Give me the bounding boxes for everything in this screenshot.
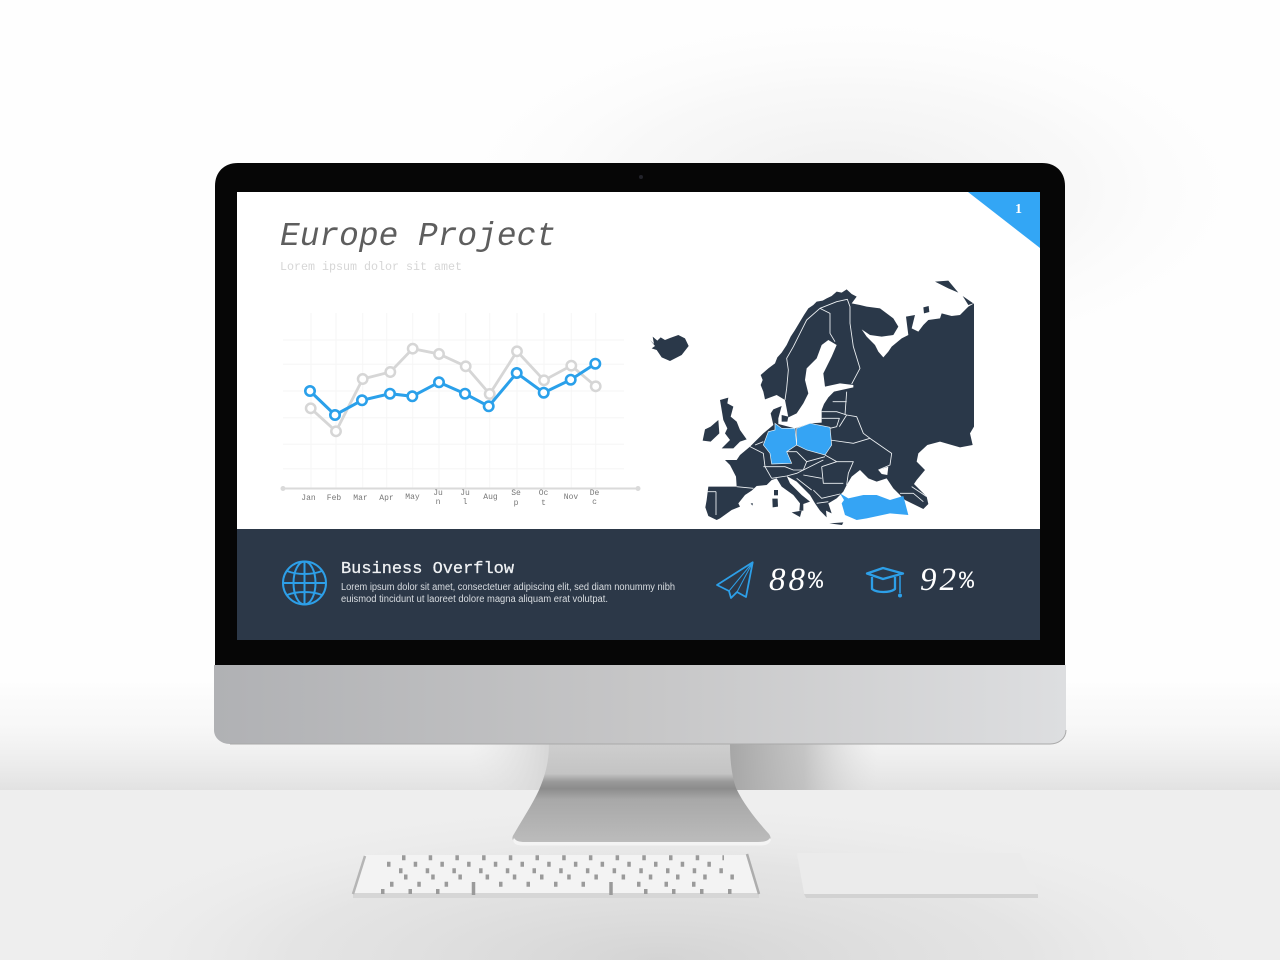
monitor chin <box>214 665 1066 744</box>
ireland <box>703 420 719 442</box>
month labels: n <box>436 498 441 507</box>
trackpad <box>797 853 1038 898</box>
title: Europe Project <box>280 218 556 255</box>
month labels: Se <box>511 489 521 498</box>
monitor <box>214 163 1066 846</box>
month labels: Aug <box>483 493 498 502</box>
blue data series <box>305 359 600 420</box>
month labels: Mar <box>353 494 368 503</box>
month labels: c <box>592 498 597 507</box>
stat: 88 percent: % <box>808 567 824 596</box>
mainland europe and russia <box>705 289 974 520</box>
month labels: Ju <box>433 489 443 498</box>
slide screen <box>237 192 1040 640</box>
monitor stand <box>512 744 771 846</box>
monitor bezel <box>215 163 1065 665</box>
country borders <box>707 299 927 515</box>
stat: 92 percent: 92 <box>920 562 959 598</box>
icon: globe <box>283 562 326 604</box>
month labels: Jan <box>301 494 316 503</box>
heading: business overflow: Business Overflow <box>341 560 515 579</box>
month labels: Ju <box>460 489 470 498</box>
keyboard <box>353 854 759 898</box>
line chart <box>280 313 640 508</box>
desk shading <box>40 795 1280 960</box>
islands <box>751 281 973 525</box>
month labels: Apr <box>379 494 394 503</box>
stat: 88 percent: 88 <box>769 562 808 598</box>
month labels: May <box>405 493 420 502</box>
body text: Lorem ipsum dolor sit amet, consectetuer adipiscing elit, sed diam nonummy nibh <box>341 582 675 593</box>
grey data series <box>306 344 600 436</box>
great britain <box>720 398 747 448</box>
iceland <box>650 335 689 361</box>
month labels: p <box>514 499 519 508</box>
footer band <box>237 529 1040 640</box>
icon: graduation cap <box>867 568 903 598</box>
page number corner: 1 <box>1015 202 1022 217</box>
highlighted germany <box>763 423 797 464</box>
month labels: t <box>541 499 546 508</box>
europe map <box>650 281 974 525</box>
chart axis <box>280 486 640 491</box>
month labels: Oc <box>539 489 548 498</box>
desk surface <box>0 790 1280 960</box>
highlighted turkey <box>840 493 908 520</box>
wall shadow left of stand <box>470 744 550 790</box>
highlighted poland <box>797 423 832 455</box>
icon: paper plane <box>717 562 753 598</box>
stat: 92 percent: % <box>959 567 975 596</box>
month labels: De <box>590 489 599 498</box>
wall shading above monitor <box>420 0 1280 380</box>
camera <box>639 175 643 179</box>
month labels: Feb <box>327 494 341 503</box>
body text: euismod tincidunt ut laoreet dolore magna aliquam erat volutpat. <box>341 594 608 605</box>
sea of azov <box>878 467 888 475</box>
month labels: Nov <box>564 493 578 502</box>
wall shading near desk <box>0 680 1280 790</box>
subtitle: Lorem ipsum dolor sit amet <box>280 260 462 274</box>
page number corner <box>968 192 1040 248</box>
body text <box>341 582 675 605</box>
month labels: l <box>463 498 468 507</box>
chin edge <box>230 730 1066 744</box>
wall shadow right of stand <box>729 744 879 790</box>
month labels <box>301 489 599 508</box>
